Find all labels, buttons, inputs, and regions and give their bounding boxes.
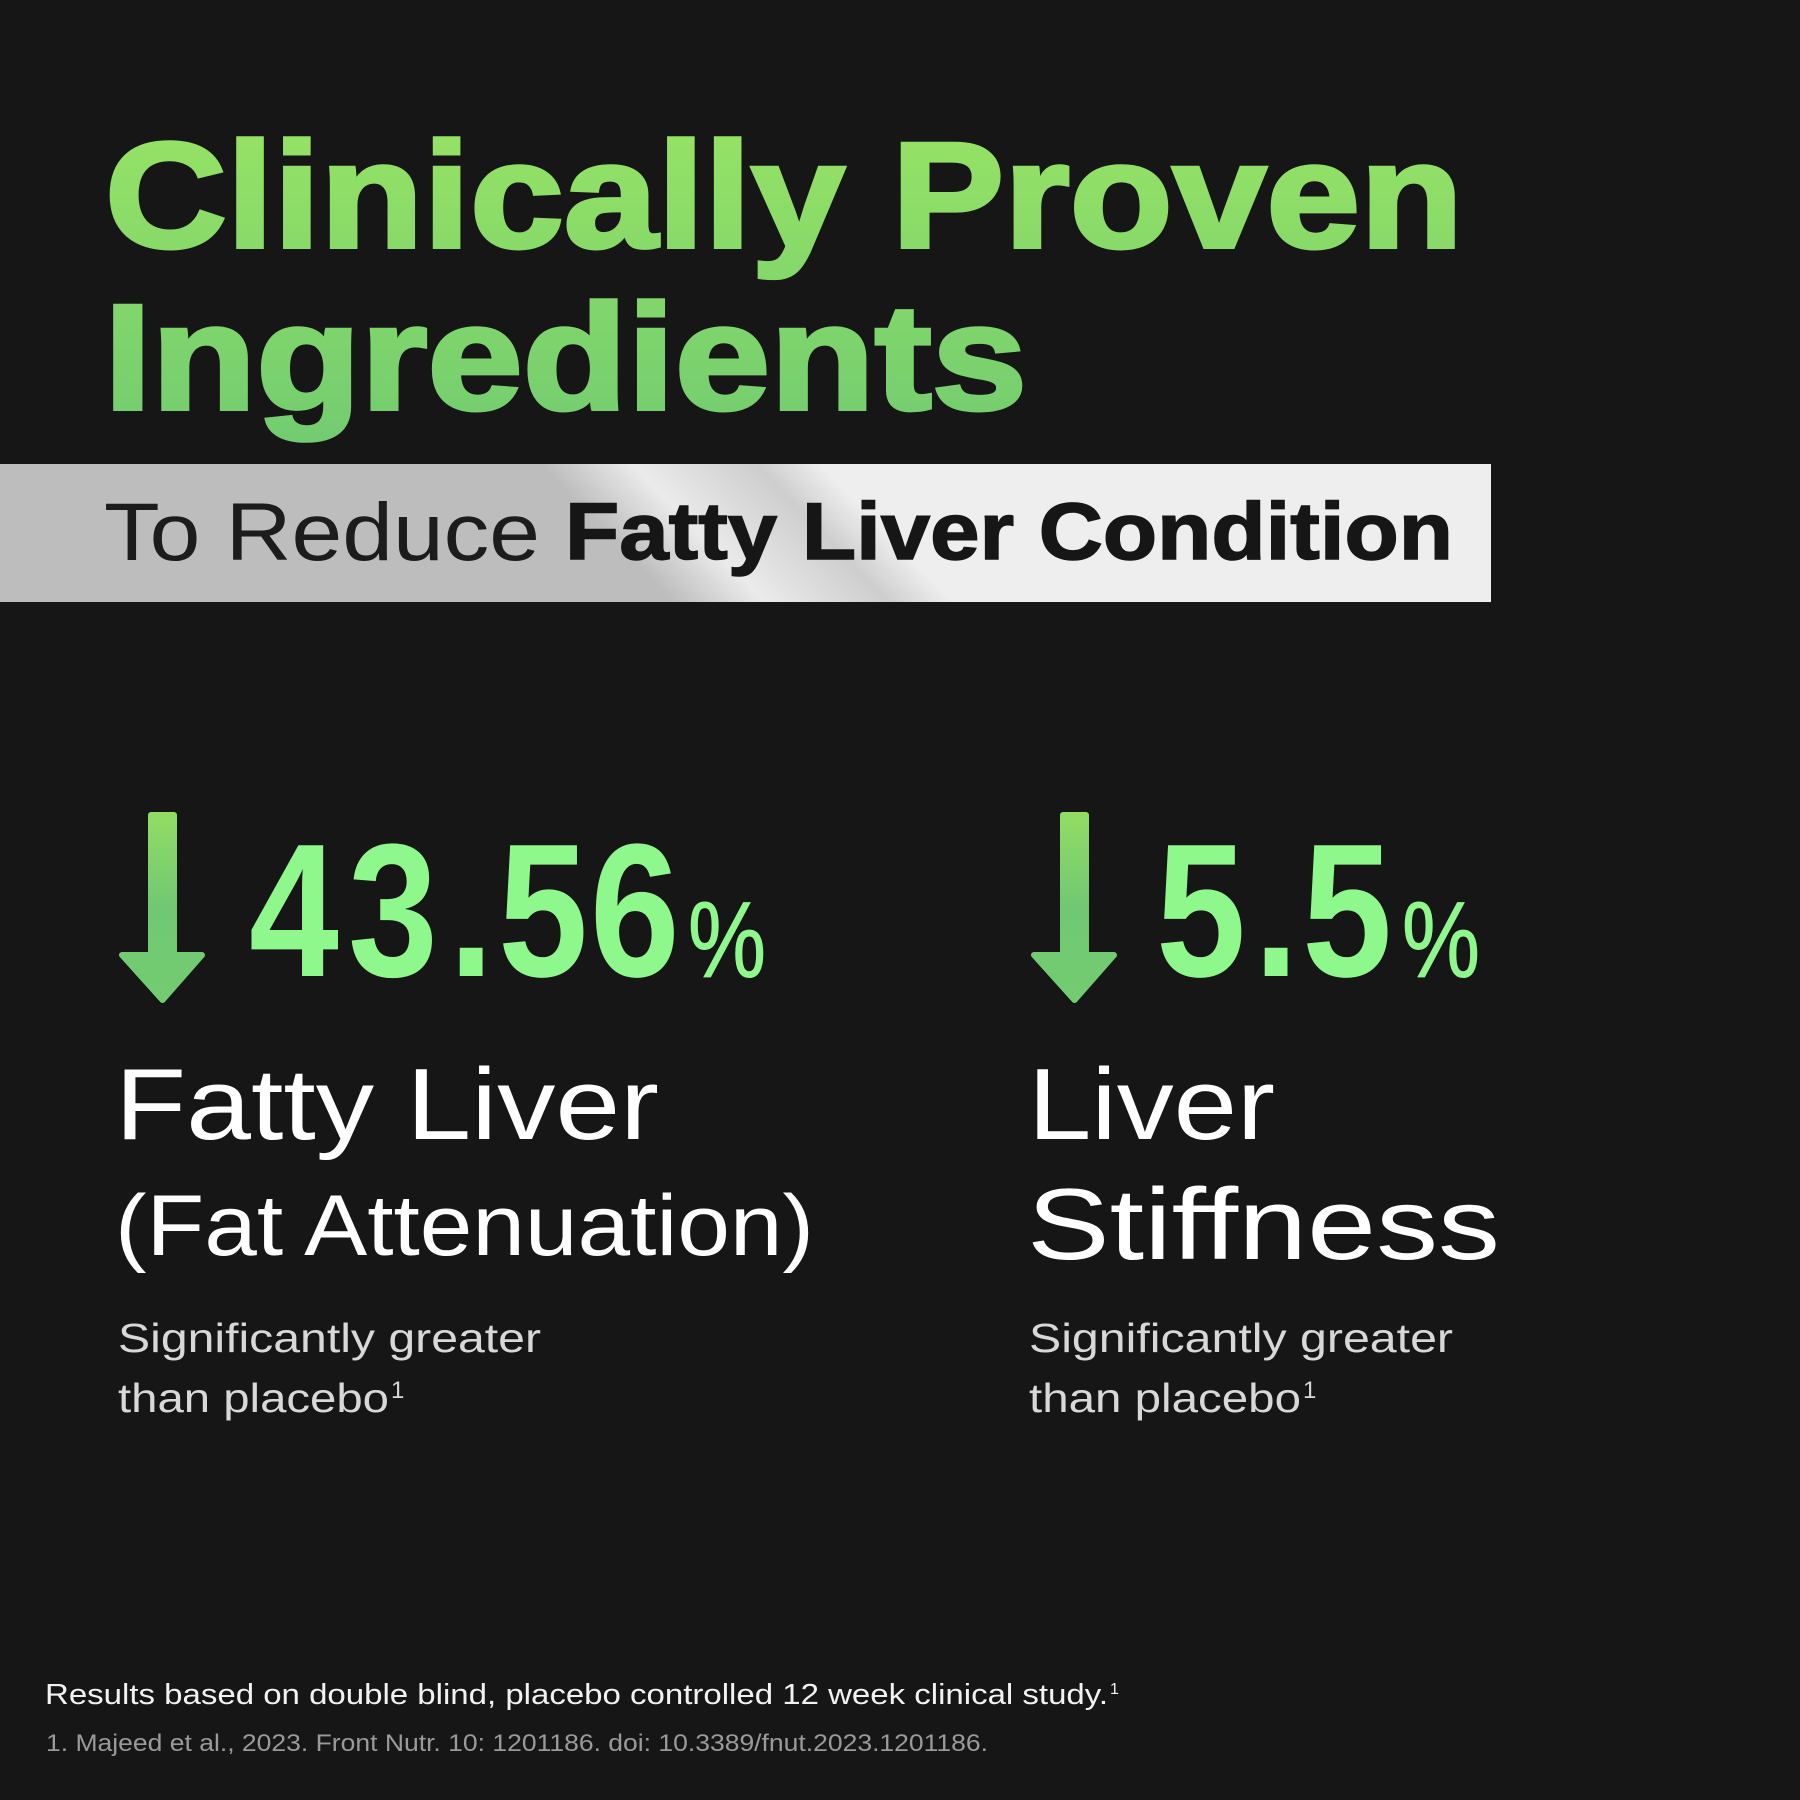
description: Significantly greater (1029, 1315, 1453, 1361)
description: 1 (1303, 1377, 1316, 1404)
value: 5.5 percent: 5.5 (1156, 805, 1392, 1017)
icon: down arrow (1034, 815, 1114, 1000)
footnote: study note: 1 (1110, 1681, 1119, 1698)
subtitle banner: To Reduce (104, 487, 540, 578)
title: Clinically Proven (105, 111, 1463, 279)
title (104, 111, 1463, 441)
footnote: citation: 1. Majeed et al., 2023. Front Nutr. 10: 1201186. doi: 10.3389/fnut.2023.1201186. (46, 1730, 988, 1757)
subtitle banner (0, 464, 1491, 602)
description: 1 (391, 1377, 404, 1404)
footnote: study note: Results based on double blind, placebo controlled 12 week clinical study. (45, 1679, 1108, 1711)
heading: liver stiffness: Liver (1028, 1049, 1275, 1161)
description: than placebo (118, 1375, 389, 1421)
heading: fatty liver: Fatty Liver (115, 1049, 659, 1161)
heading: liver stiffness (1027, 1049, 1500, 1281)
panel: fatty liver stat (115, 805, 814, 1421)
heading: liver stiffness: Stiffness (1027, 1169, 1500, 1281)
value: 43.56 percent: % (688, 879, 766, 1000)
panel: liver stiffness stat (1027, 805, 1500, 1421)
description (118, 1315, 541, 1421)
value: 5.5 percent: % (1402, 879, 1480, 1000)
value: 43.56 percent: 43.56 (249, 805, 680, 1017)
subheading: fat attenuation: (Fat Attenuation) (115, 1178, 814, 1274)
description: Significantly greater (118, 1315, 541, 1361)
icon: down arrow (122, 815, 202, 1000)
description (1029, 1315, 1453, 1421)
description: than placebo (1029, 1375, 1301, 1421)
subtitle banner: Fatty Liver Condition (565, 487, 1453, 577)
title: Ingredients (104, 273, 1027, 441)
